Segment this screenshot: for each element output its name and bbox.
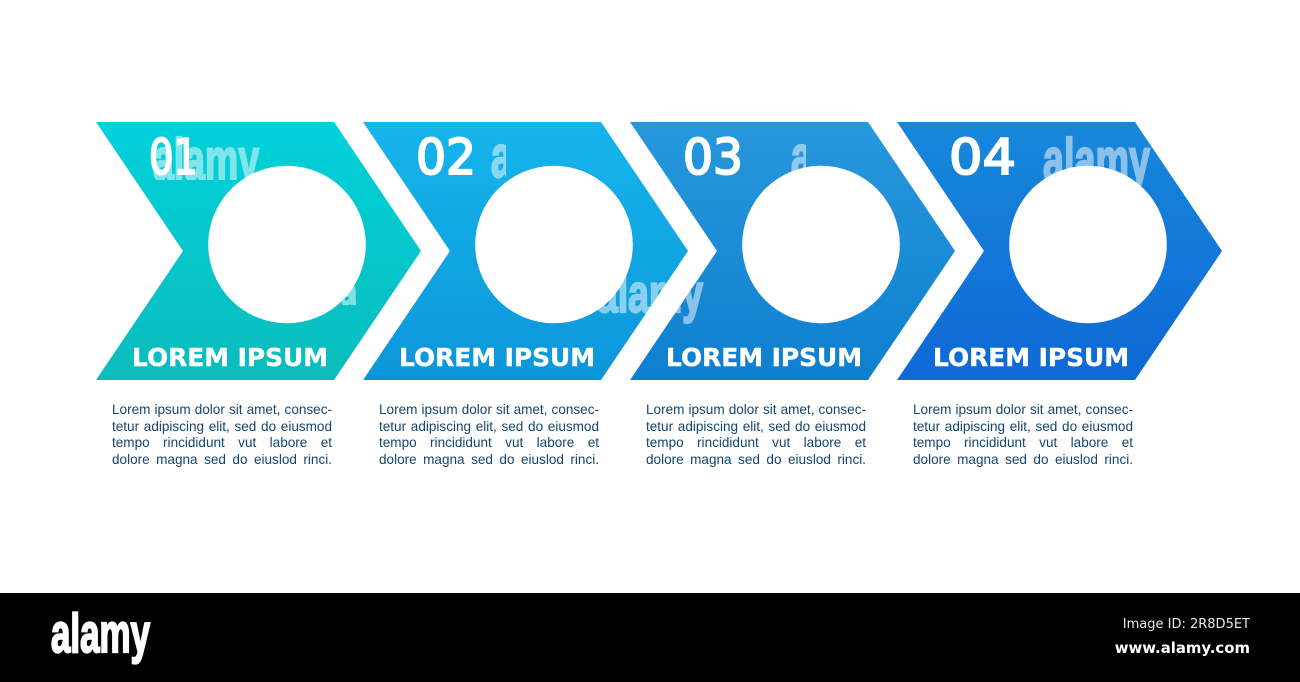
text block 4: dolore magna sed do eiuslod rinci. <box>913 452 1133 467</box>
website: www.alamy.com <box>1115 639 1250 657</box>
text block 2: tempo rincididunt vut labore et <box>379 435 599 450</box>
text block 2 <box>379 402 599 467</box>
panel: step 1 arrow <box>96 122 421 380</box>
watermark 1: alamy <box>153 127 259 193</box>
text block 3: tetur adipiscing elit, sed do eiusmod <box>646 419 866 434</box>
panel: step 3 arrow <box>597 122 955 380</box>
number 02: 02 <box>416 129 476 186</box>
footer bar <box>0 593 1300 682</box>
text block 2: tetur adipiscing elit, sed do eiusmod <box>379 419 599 434</box>
heading 2: LOREM IPSUM <box>399 343 595 372</box>
circle 1 <box>208 166 366 323</box>
number 03: 03 <box>683 129 743 186</box>
watermark 2: alamy <box>491 124 597 190</box>
text block 1: tetur adipiscing elit, sed do eiusmod <box>112 419 332 434</box>
text block 2: dolore magna sed do eiuslod rinci. <box>379 452 599 467</box>
watermark 3 lower: alamy <box>597 264 703 324</box>
panel: step 4 arrow <box>897 122 1222 380</box>
text block 1 <box>112 402 332 467</box>
heading 3: LOREM IPSUM <box>666 343 862 372</box>
text block 3 <box>646 402 866 467</box>
number 04: 04 <box>949 129 1016 186</box>
circle 3 <box>742 166 900 323</box>
text block 1: tempo rincididunt vut labore et <box>112 435 332 450</box>
circle 4 <box>1009 166 1167 323</box>
text block 3: dolore magna sed do eiuslod rinci. <box>646 452 866 467</box>
heading 4: LOREM IPSUM <box>933 343 1129 372</box>
watermark 4: alamy <box>1043 127 1150 193</box>
text block 3: tempo rincididunt vut labore et <box>646 435 866 450</box>
text block 1: dolore magna sed do eiuslod rinci. <box>112 452 332 467</box>
heading 1: LOREM IPSUM <box>132 343 328 372</box>
text block 3: Lorem ipsum dolor sit amet, consec- <box>646 402 866 417</box>
circle 2 <box>475 166 633 323</box>
watermark 1 lower: a <box>338 270 358 314</box>
watermark 2 lower: alamy <box>597 264 703 324</box>
text block 2: Lorem ipsum dolor sit amet, consec- <box>379 402 599 417</box>
text block 1: Lorem ipsum dolor sit amet, consec- <box>112 402 332 417</box>
number 01: 01 <box>149 129 198 186</box>
text block 4: tempo rincididunt vut labore et <box>913 435 1133 450</box>
image id: Image ID: 2R8D5ET <box>1123 617 1250 632</box>
watermark 3: alamy <box>791 124 897 190</box>
panel: step 2 arrow <box>363 122 703 380</box>
text block 4: tetur adipiscing elit, sed do eiusmod <box>913 419 1133 434</box>
text block 4 <box>913 402 1133 467</box>
text block 4: Lorem ipsum dolor sit amet, consec- <box>913 402 1133 417</box>
